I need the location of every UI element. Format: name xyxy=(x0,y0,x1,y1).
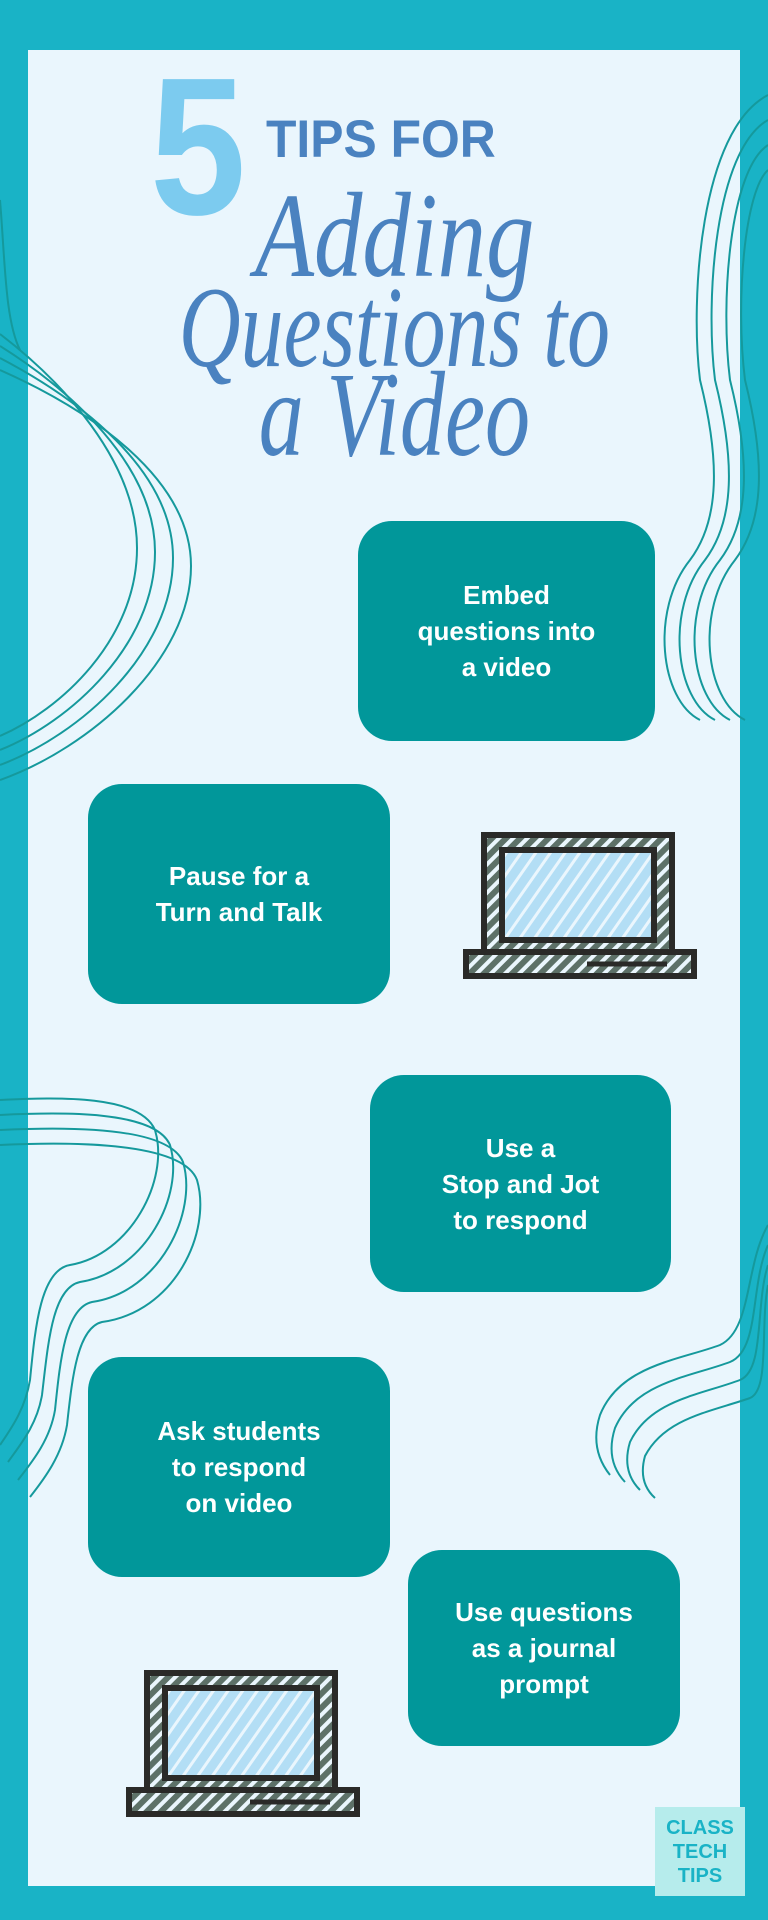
tip 5 xyxy=(408,1550,680,1746)
tip 5: as a journal xyxy=(472,1633,616,1663)
script title: Adding xyxy=(255,168,534,303)
tip 5: prompt xyxy=(499,1669,589,1699)
tip 3: Use a xyxy=(486,1132,555,1162)
tip 4 xyxy=(88,1357,390,1577)
logo: TIPS xyxy=(678,1864,722,1886)
tip 4: to respond xyxy=(172,1452,306,1482)
number 5: 5 xyxy=(150,37,246,256)
icon: laptop 2 xyxy=(126,1670,360,1817)
script title: a Video xyxy=(259,347,530,482)
tip 2 xyxy=(88,784,390,1004)
heading: tips for: TIPS FOR xyxy=(266,110,496,169)
tip 3 xyxy=(370,1075,671,1292)
logo: CLASS xyxy=(666,1816,734,1838)
logo: TECH xyxy=(673,1840,727,1862)
tip 4: on video xyxy=(186,1488,292,1518)
tip 2: Turn and Talk xyxy=(156,897,322,927)
title xyxy=(150,37,610,482)
tip 1: questions into xyxy=(418,616,595,646)
logo xyxy=(655,1807,745,1896)
script title xyxy=(179,168,610,482)
tip 1 xyxy=(358,521,655,741)
tip 1: a video xyxy=(462,652,551,682)
tip 4: Ask students xyxy=(157,1416,321,1446)
script title: Questions to xyxy=(179,263,610,391)
tip 3: Stop and Jot xyxy=(442,1168,599,1198)
icon: laptop 1 xyxy=(463,832,697,979)
tip 5: Use questions xyxy=(455,1597,633,1627)
tip 2: Pause for a xyxy=(169,861,309,891)
tip 3: to respond xyxy=(453,1204,588,1234)
tip 1: Embed xyxy=(463,580,550,610)
